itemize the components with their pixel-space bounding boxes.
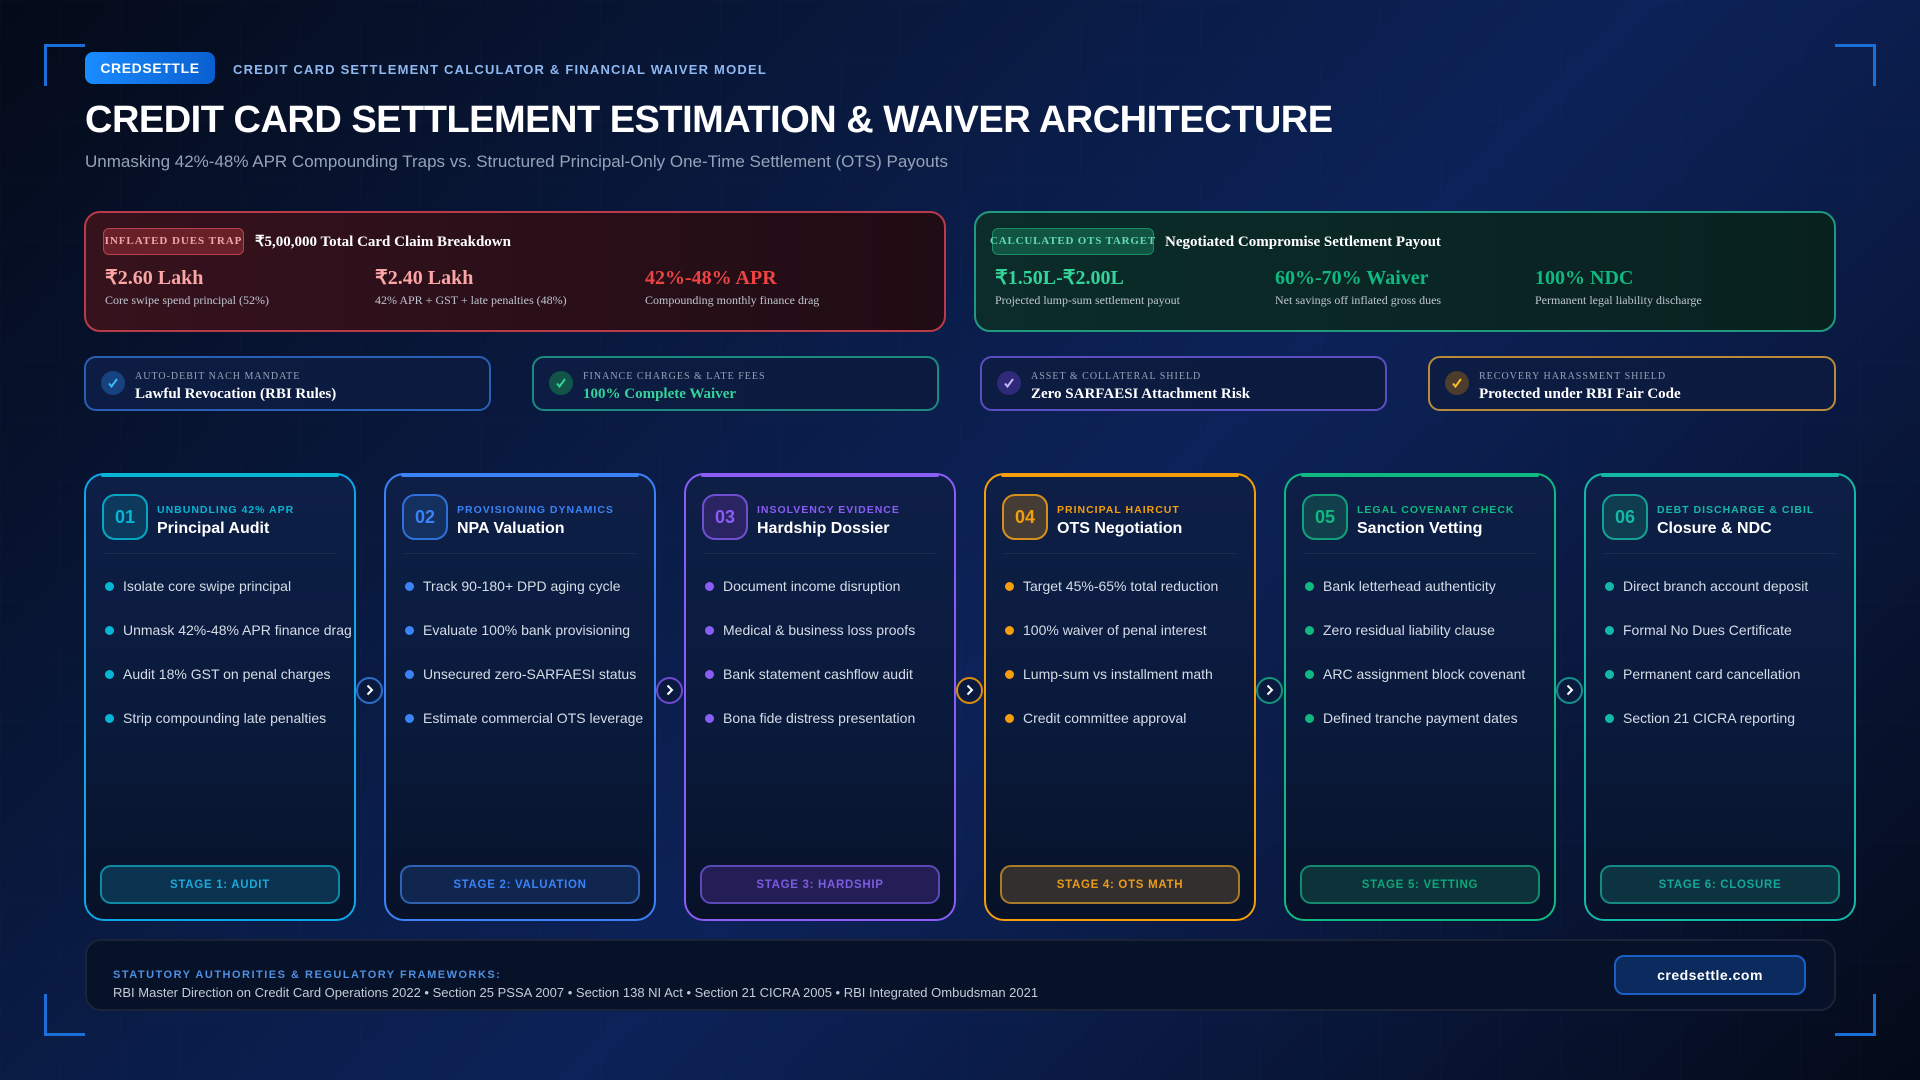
- description: APR: Compounding monthly finance drag: [645, 293, 819, 307]
- description: penalties: 42% APR + GST + late penalties (48%): [375, 293, 567, 307]
- stage card 03: [684, 473, 956, 921]
- number: [1602, 494, 1648, 540]
- value: Lawful Revocation (RBI Rules): [135, 386, 336, 402]
- description: payout: Projected lump-sum settlement payout: [995, 293, 1180, 307]
- tag: inflated dues trap: INFLATED DUES TRAP: [105, 235, 242, 247]
- stage label: [400, 865, 640, 904]
- arrow 2: [656, 676, 683, 704]
- value: penalties: ₹2.40 Lakh: [375, 267, 473, 289]
- bullet: Isolate core swipe principal: [123, 578, 291, 594]
- icon: check: [1445, 371, 1469, 395]
- kicker: UNBUNDLING 42% APR: [157, 504, 294, 516]
- panel: inflated dues trap: [84, 211, 946, 332]
- top accent: [101, 473, 339, 477]
- bullet: Target 45%-65% total reduction: [1023, 578, 1218, 594]
- bullet: Section 21 CICRA reporting: [1623, 710, 1795, 726]
- stage card 01: [84, 473, 356, 921]
- top accent: [701, 473, 939, 477]
- card title: Principal Audit: [157, 520, 269, 536]
- brand badge: CREDSETTLE: [100, 60, 200, 76]
- icon: check: [997, 371, 1021, 395]
- icon: check: [101, 371, 125, 395]
- value: waiver: 60%-70% Waiver: [1275, 267, 1429, 289]
- arrow 4: [1256, 676, 1283, 704]
- bullet: Unmask 42%-48% APR finance drag: [123, 622, 352, 638]
- eyebrow text: CREDIT CARD SETTLEMENT CALCULATOR & FINANCIAL WAIVER MODEL: [233, 62, 767, 77]
- label: ASSET & COLLATERAL SHIELD: [1031, 371, 1201, 382]
- bullet: Estimate commercial OTS leverage: [423, 710, 643, 726]
- bullet: Formal No Dues Certificate: [1623, 622, 1792, 638]
- info card: finance charges: [532, 356, 939, 411]
- bullet: Bank letterhead authenticity: [1323, 578, 1496, 594]
- brand badge: [85, 52, 215, 84]
- kicker: DEBT DISCHARGE & CIBIL: [1657, 504, 1814, 516]
- corner bracket: bottom right: [1835, 994, 1876, 1036]
- stage card 05: [1284, 473, 1556, 921]
- number: [102, 494, 148, 540]
- info card: recovery shield: [1428, 356, 1836, 411]
- bullet: Strip compounding late penalties: [123, 710, 326, 726]
- corner bracket: bottom left: [44, 994, 85, 1036]
- stage label: [100, 865, 340, 904]
- kicker: INSOLVENCY EVIDENCE: [757, 504, 900, 516]
- bullet: 100% waiver of penal interest: [1023, 622, 1207, 638]
- bullet: Lump-sum vs installment math: [1023, 666, 1213, 682]
- bullet: Zero residual liability clause: [1323, 622, 1495, 638]
- kicker: PRINCIPAL HAIRCUT: [1057, 504, 1180, 516]
- card title: NPA Valuation: [457, 520, 565, 536]
- stage label: STAGE 5: VETTING: [1362, 879, 1478, 891]
- top accent: [401, 473, 639, 477]
- number: [1002, 494, 1048, 540]
- number: 06: [1615, 507, 1635, 527]
- value: NDC: 100% NDC: [1535, 267, 1633, 289]
- footer references: RBI Master Direction on Credit Card Operations 2022 • Section 25 PSSA 2007 • Section 138 NI Act • Section 21 CICRA 2005 • RBI Integrated Ombudsman 2021: [113, 985, 1038, 1000]
- stage label: [700, 865, 940, 904]
- description: principal: Core swipe spend principal (52%): [105, 293, 269, 307]
- footer heading: STATUTORY AUTHORITIES & REGULATORY FRAMEWORKS:: [113, 969, 501, 981]
- card title: OTS Negotiation: [1057, 520, 1182, 536]
- arrow 5: [1556, 676, 1583, 704]
- top accent: [1001, 473, 1239, 477]
- bullet: Bank statement cashflow audit: [723, 666, 913, 682]
- value: principal: ₹2.60 Lakh: [105, 267, 203, 289]
- value: APR: 42%-48% APR: [645, 267, 777, 289]
- stage card 02: [384, 473, 656, 921]
- card title: Closure & NDC: [1657, 520, 1772, 536]
- number: 01: [115, 507, 135, 527]
- value: Zero SARFAESI Attachment Risk: [1031, 386, 1250, 402]
- value: Protected under RBI Fair Code: [1479, 386, 1681, 402]
- bullet: Track 90-180+ DPD aging cycle: [423, 578, 621, 594]
- value: 100% Complete Waiver: [583, 386, 736, 402]
- card title: Hardship Dossier: [757, 520, 889, 536]
- bullet: Credit committee approval: [1023, 710, 1186, 726]
- top accent: [1301, 473, 1539, 477]
- panel heading: ₹5,00,000 Total Card Claim Breakdown: [255, 234, 511, 250]
- stage label: [1600, 865, 1840, 904]
- stage label: STAGE 4: OTS MATH: [1057, 879, 1183, 891]
- tag: calculated OTS target: CALCULATED OTS TARGET: [990, 235, 1156, 247]
- bullet: ARC assignment block covenant: [1323, 666, 1525, 682]
- stage card 06: [1584, 473, 1856, 921]
- stage label: [1000, 865, 1240, 904]
- arrow 3: [956, 676, 983, 704]
- card title: Sanction Vetting: [1357, 520, 1482, 536]
- label: RECOVERY HARASSMENT SHIELD: [1479, 371, 1666, 382]
- bullet: Direct branch account deposit: [1623, 578, 1808, 594]
- number: [702, 494, 748, 540]
- description: NDC: Permanent legal liability discharge: [1535, 293, 1702, 307]
- label: AUTO-DEBIT NACH MANDATE: [135, 371, 300, 382]
- kicker: LEGAL COVENANT CHECK: [1357, 504, 1514, 516]
- stage label: STAGE 1: AUDIT: [170, 879, 270, 891]
- number: 04: [1015, 507, 1035, 527]
- kicker: PROVISIONING DYNAMICS: [457, 504, 614, 516]
- corner bracket: top left: [44, 44, 85, 86]
- title: CREDIT CARD SETTLEMENT ESTIMATION & WAIVER ARCHITECTURE: [85, 98, 1333, 140]
- bullet: Defined tranche payment dates: [1323, 710, 1518, 726]
- number: [1302, 494, 1348, 540]
- number: 05: [1315, 507, 1335, 527]
- bullet: Document income disruption: [723, 578, 900, 594]
- number: 02: [415, 507, 435, 527]
- panel: calculated OTS target: [974, 211, 1836, 332]
- subtitle: Unmasking 42%-48% APR Compounding Traps vs. Structured Principal-Only One-Time Settlement (OTS) Payouts: [85, 152, 948, 171]
- bullet: Evaluate 100% bank provisioning: [423, 622, 630, 638]
- number: 03: [715, 507, 735, 527]
- tag: calculated OTS target: [992, 228, 1154, 255]
- bullet: Permanent card cancellation: [1623, 666, 1800, 682]
- bullet: Audit 18% GST on penal charges: [123, 666, 331, 682]
- panel heading: Negotiated Compromise Settlement Payout: [1165, 234, 1441, 250]
- top accent: [1601, 473, 1839, 477]
- icon: check: [549, 371, 573, 395]
- tag: inflated dues trap: [103, 228, 244, 255]
- stage card 04: [984, 473, 1256, 921]
- bullet: Bona fide distress presentation: [723, 710, 915, 726]
- stage label: STAGE 6: CLOSURE: [1659, 879, 1781, 891]
- corner bracket: top right: [1835, 44, 1876, 86]
- description: waiver: Net savings off inflated gross dues: [1275, 293, 1441, 307]
- stage label: [1300, 865, 1540, 904]
- stage label: STAGE 3: HARDSHIP: [756, 879, 884, 891]
- website button: credsettle.com: [1657, 967, 1763, 983]
- label: FINANCE CHARGES & LATE FEES: [583, 371, 766, 382]
- footer panel: [85, 939, 1836, 1011]
- bullet: Unsecured zero-SARFAESI status: [423, 666, 636, 682]
- website button: [1614, 955, 1806, 995]
- number: [402, 494, 448, 540]
- stage label: STAGE 2: VALUATION: [453, 879, 587, 891]
- bullet: Medical & business loss proofs: [723, 622, 915, 638]
- value: payout: ₹1.50L-₹2.00L: [995, 267, 1124, 289]
- arrow 1: [356, 676, 383, 704]
- info card: asset shield: [980, 356, 1387, 411]
- info card: auto-debit: [84, 356, 491, 411]
